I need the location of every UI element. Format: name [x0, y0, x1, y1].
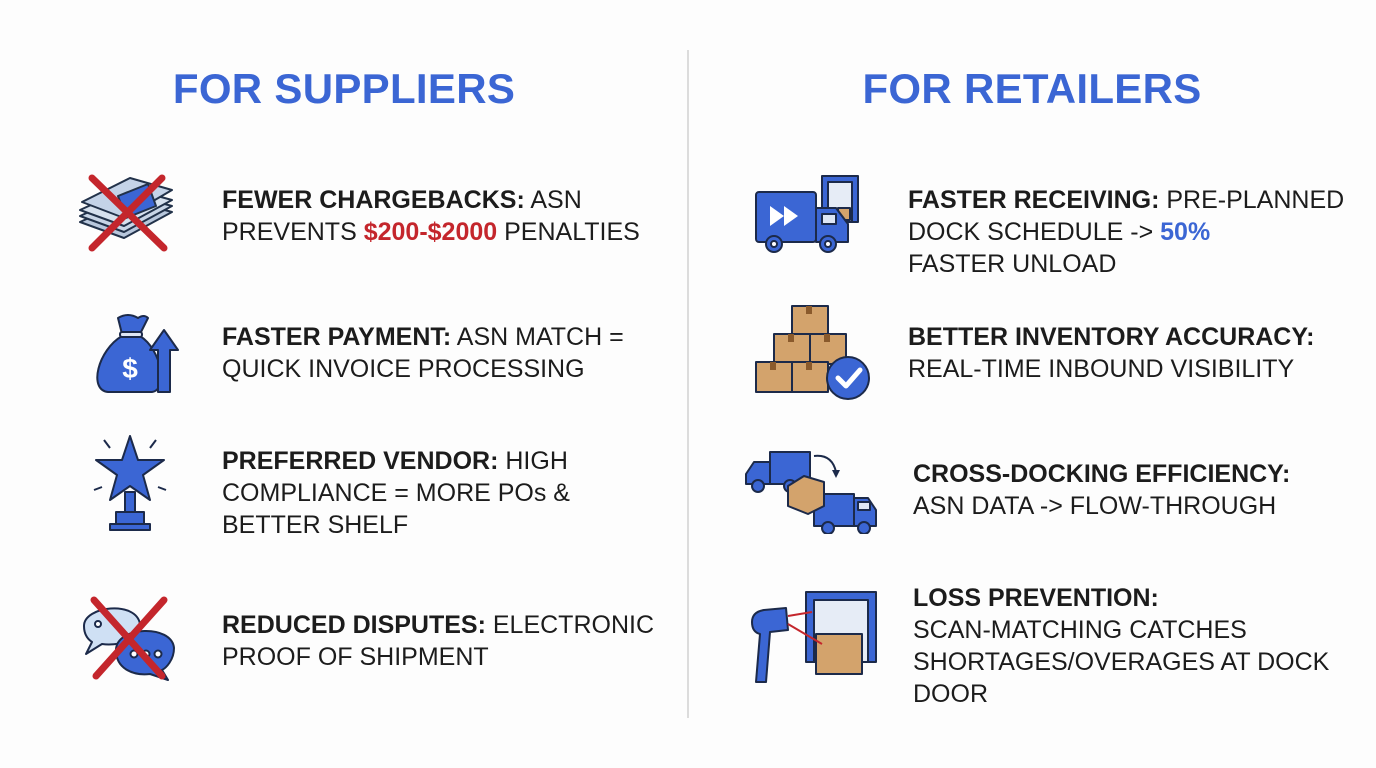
text: reduced disputes: PROOF OF SHIPMENT	[222, 643, 489, 671]
icon: boxes with check	[755, 305, 870, 400]
text: loss prevention: LOSS PREVENTION:	[913, 584, 1159, 612]
text: preferred vendor: BETTER SHELF	[222, 511, 408, 539]
text: faster receiving: DOCK SCHEDULE -> 50%	[908, 218, 1210, 246]
divider	[687, 50, 689, 718]
text: faster payment: FASTER PAYMENT: ASN MATCH =	[222, 323, 624, 351]
text: preferred vendor: PREFERRED VENDOR: HIGH	[222, 447, 568, 475]
heading: for suppliers: FOR SUPPLIERS	[173, 65, 515, 112]
text: loss prevention: SCAN-MATCHING CATCHES	[913, 616, 1247, 644]
text: fewer chargebacks: PREVENTS $200-$2000 PENALTIES	[222, 218, 640, 246]
icon: star trophy	[94, 435, 166, 531]
text: loss prevention: DOOR	[913, 680, 988, 708]
text: preferred vendor	[222, 447, 570, 539]
icon: money bag with arrow: $	[122, 353, 138, 384]
text: faster receiving: FASTER RECEIVING: PRE-PLANNED	[908, 186, 1344, 214]
text: better inventory accuracy	[908, 323, 1315, 383]
text: better inventory accuracy: REAL-TIME INBOUND VISIBILITY	[908, 355, 1294, 383]
text: fewer chargebacks	[222, 186, 640, 246]
text: faster receiving: FASTER UNLOAD	[908, 250, 1116, 278]
text: cross-docking efficiency: CROSS-DOCKING EFFICIENCY:	[913, 460, 1290, 488]
icon: scanner and dock	[751, 591, 877, 683]
text: faster receiving	[908, 186, 1344, 278]
icon: cross-docking trucks	[745, 451, 877, 534]
text: cross-docking efficiency: ASN DATA -> FLOW-THROUGH	[913, 492, 1276, 520]
heading: for retailers: FOR RETAILERS	[862, 65, 1202, 112]
text: loss prevention: SHORTAGES/OVERAGES AT DOCK	[913, 648, 1329, 676]
text: better inventory accuracy: BETTER INVENTORY ACCURACY:	[908, 323, 1315, 351]
icon: fast truck at dock	[755, 175, 859, 253]
text: loss prevention	[913, 584, 1329, 708]
icon: cash crossed	[79, 174, 173, 252]
text: faster payment: QUICK INVOICE PROCESSING	[222, 355, 585, 383]
text: cross-docking efficiency	[913, 460, 1290, 520]
icon: money bag with arrow	[96, 314, 179, 393]
icon: chat bubbles crossed	[83, 596, 175, 681]
text: fewer chargebacks: FEWER CHARGEBACKS: ASN	[222, 186, 582, 214]
text: preferred vendor: COMPLIANCE = MORE POs &	[222, 479, 570, 507]
text: faster payment	[222, 323, 624, 383]
text: reduced disputes	[222, 611, 654, 671]
text: reduced disputes: REDUCED DISPUTES: ELECTRONIC	[222, 611, 654, 639]
